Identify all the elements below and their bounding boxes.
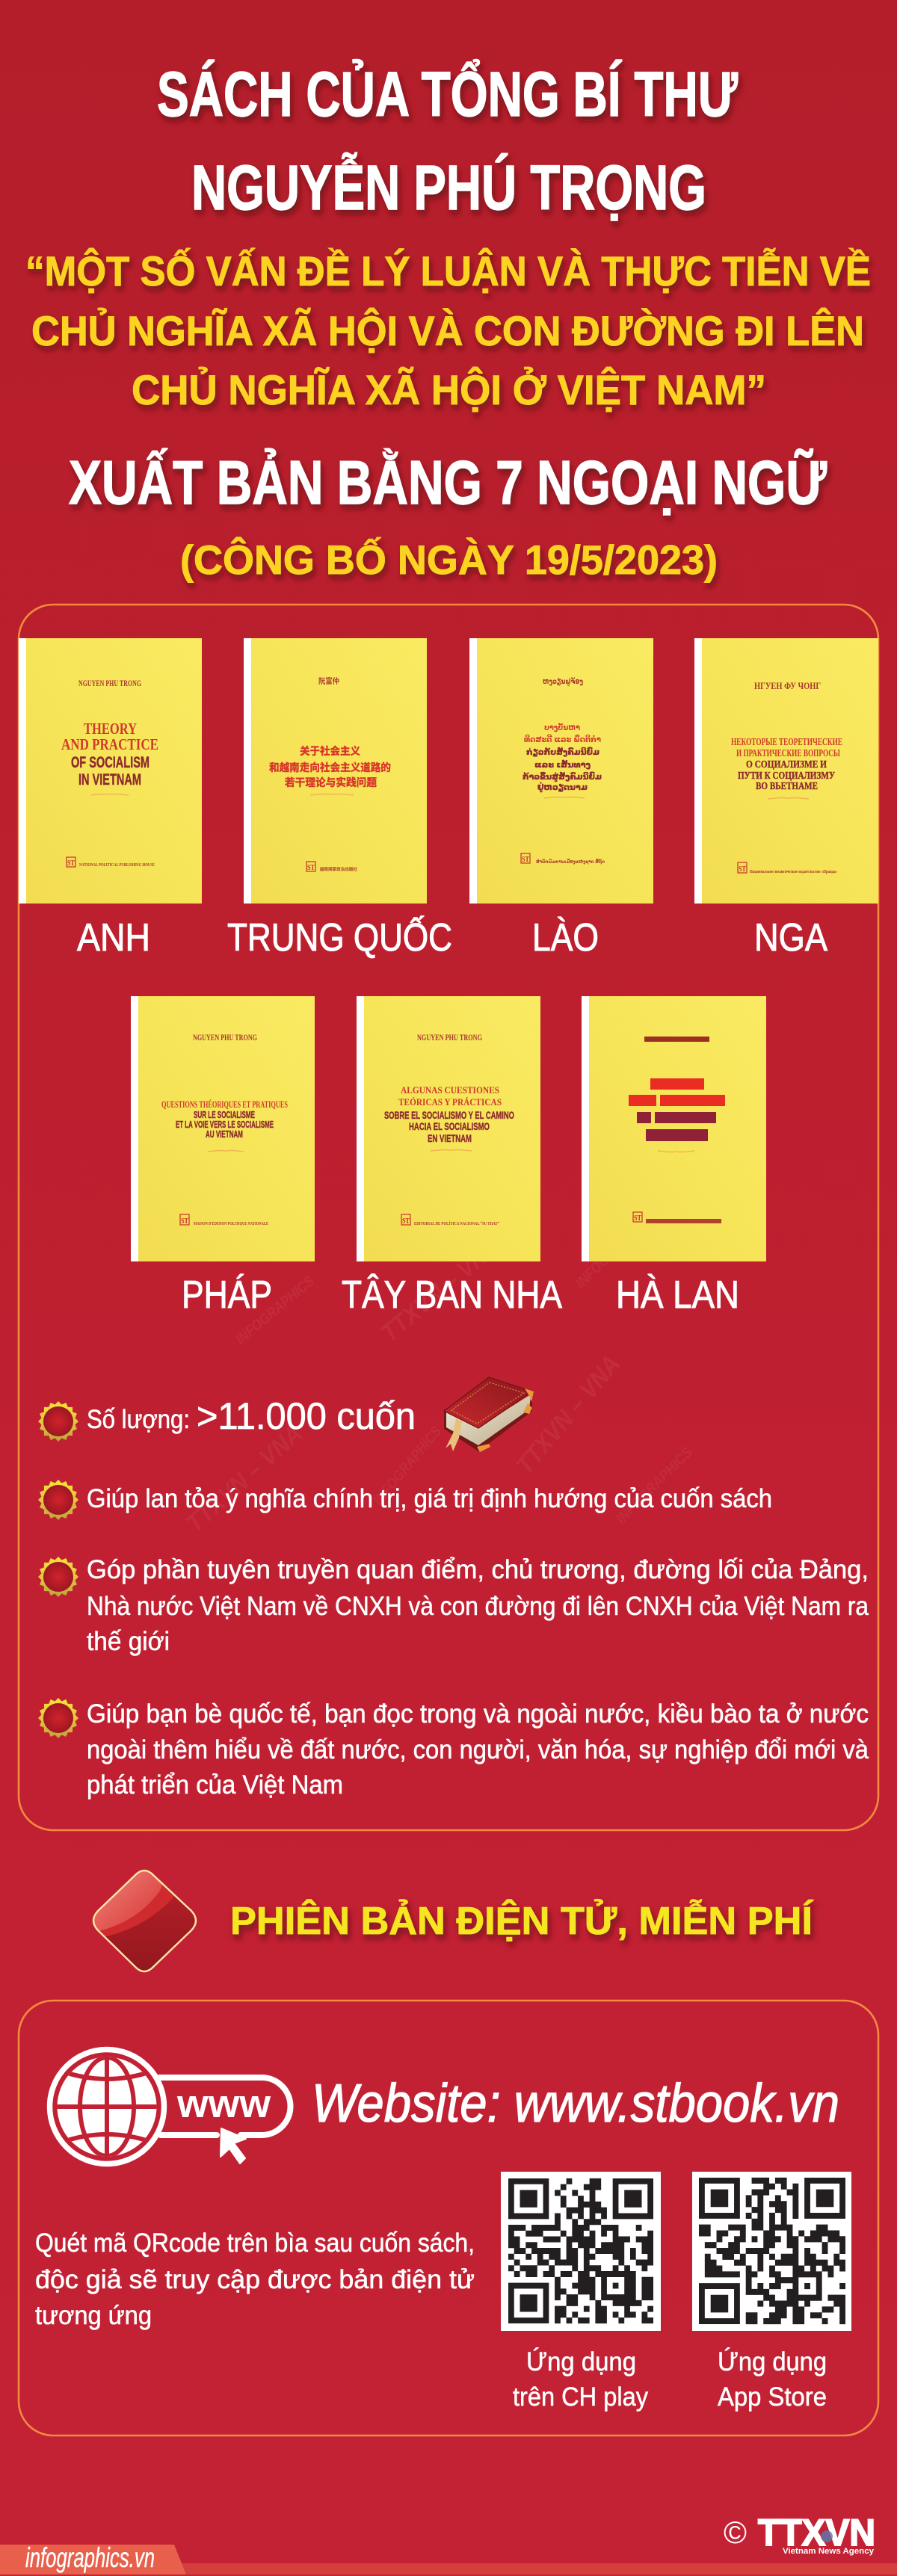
caption: App Store: Ứng dụng: [718, 2347, 827, 2376]
book: Lao: ບາງບັນຫາ: [544, 723, 580, 732]
quantity text: [87, 1395, 416, 1437]
book: English: THEORY: [84, 720, 137, 738]
bullet: propaganda: [37, 1555, 869, 1656]
text: Góp phần tuyên truyền quan điểm, chủ trương, đường lối của Đảng,: [87, 1555, 869, 1584]
panel border: [19, 2001, 878, 2436]
book: English: NGUYEN PHU TRONG: [78, 678, 141, 688]
text: Giúp bạn bè quốc tế, bạn đọc trong và ngoài nước, kiều bào ta ở nước: [87, 1699, 869, 1729]
QR code: App Store: [692, 2172, 851, 2331]
book: French: [131, 996, 315, 1261]
caption: CH play: Ứng dụng: [526, 2347, 636, 2376]
logo: TTXVN: ©: [724, 2515, 747, 2550]
website address: Website: www.stbook.vn: [312, 2074, 839, 2134]
logo: TTXVN: Vietnam News Agency: [783, 2547, 875, 2556]
text: Giúp lan tỏa ý nghĩa chính trị, giá trị định hướng của cuốn sách: [87, 1484, 772, 1513]
watermarks: INFOGRAPHICS: [370, 1423, 446, 1508]
watermarks: TTXVN – VNA: [511, 1350, 626, 1480]
heading: electronic edition: PHIÊN BẢN ĐIỆN TỬ, MIỄN PHÍ: [230, 1899, 814, 1943]
book: Chinese: ST: [307, 863, 315, 872]
icon: seal bullet: [37, 1697, 79, 1739]
book: Spanish: NGUYEN PHU TRONG: [417, 1032, 482, 1043]
watermarks: TTXVN – VNA: [181, 1419, 308, 1538]
panel: website and QR codes: [19, 2001, 878, 2436]
watermarks: TTXVN – VNA: [376, 1232, 506, 1347]
book: Spanish: SOBRE EL SOCIALISMO Y EL CAMINO: [384, 1109, 514, 1121]
bullet: quantity: [37, 1377, 534, 1452]
icon: www globe: [49, 2049, 290, 2164]
book: Russian: О СОЦИАЛИЗМЕ И: [746, 759, 827, 770]
book: English: NATIONAL POLITICAL PUBLISHING HOUSE: [79, 862, 155, 868]
watermarks: INFOGRAPHICS: [613, 1444, 696, 1528]
book: Spanish: ST: [402, 1217, 410, 1226]
book title in yellow: CHỦ NGHĨA XÃ HỘI VÀ CON ĐƯỜNG ĐI LÊN: [31, 307, 864, 354]
quantity text: Số lượng:: [87, 1405, 190, 1434]
book: Russian: НГУЕН ФУ ЧОНГ: [754, 680, 821, 691]
book: Lao: ສຳນັກພິມການເມືອງແຫ່ງຊາດ ສື່ຖັດ: [536, 858, 605, 865]
watermarks: [181, 1211, 696, 1538]
book: Russian: ВО ВЬЕТНАМЕ: [756, 781, 818, 792]
row 1 language labels: LÀO: [532, 916, 599, 960]
title: [25, 59, 871, 583]
row 1 language labels: TRUNG QUỐC: [227, 915, 452, 960]
watermarks: INFOGRAPHICS: [573, 1211, 653, 1292]
book: Russian: И ПРАКТИЧЕСКИЕ ВОПРОСЫ: [736, 748, 840, 759]
book: Russian: ST: [739, 865, 746, 874]
book: Lao: [469, 638, 653, 904]
row 2 language labels: HÀ LAN: [616, 1273, 739, 1317]
book: English: OF SOCIALISM: [71, 754, 150, 771]
QR code: CH play: [501, 2172, 661, 2331]
book: Dutch: ST: [634, 1214, 641, 1223]
title line 1: SÁCH CỦA TỔNG BÍ THƯ: [157, 59, 738, 129]
book: English: ST: [67, 859, 75, 868]
footer band: [0, 2542, 897, 2575]
book: English: AND PRACTICE: [61, 735, 158, 753]
book: Spanish: EN VIETNAM: [428, 1132, 472, 1144]
instructions: Quét mã QRcode trên bìa sau cuốn sách,: [35, 2228, 475, 2258]
text: thế giới: [87, 1627, 170, 1656]
title line 2: NGUYỄN PHÚ TRỌNG: [191, 152, 706, 223]
book: French: ST: [181, 1217, 188, 1226]
watermarks: INFOGRAPHICS: [232, 1273, 318, 1348]
book: Chinese: 阮富仲: [318, 676, 339, 686]
book: French: NGUYEN PHU TRONG: [193, 1032, 257, 1043]
book: Spanish: [357, 996, 540, 1261]
book: Chinese: 越南国家政治出版社: [320, 866, 357, 872]
book: Spanish: HACIA EL SOCIALISMO: [409, 1120, 490, 1132]
book: French: QUESTIONS THÉORIQUES ET PRATIQUES: [161, 1099, 288, 1110]
book: Lao: ແລະ ເສັ້ນທາງ: [534, 760, 591, 770]
instructions: [35, 2228, 475, 2330]
text: phát triển của Việt Nam: [87, 1770, 343, 1800]
book: Lao: ST: [522, 855, 529, 864]
bullet: international understanding: [37, 1697, 869, 1800]
book: Spanish: EDITORIAL DE POLÍTICA NACIONAL “SU THAT”: [414, 1220, 499, 1226]
book title in yellow: [25, 247, 871, 413]
row 2 language labels: TÂY BAN NHA: [342, 1273, 562, 1317]
book: Lao: ຢູ່ຫວຽດນາມ: [537, 782, 588, 793]
book: Lao: ຫງວຽນຝູຈ້ອງ: [543, 676, 583, 687]
book: Lao: ທິດສະດີ ແລະ ພຶດຕິກຳ: [524, 734, 601, 744]
book: French: AU VIETNAM: [206, 1128, 243, 1140]
book: Dutch: [582, 996, 766, 1261]
caption: App Store: App Store: [718, 2382, 827, 2412]
text: [87, 1555, 869, 1656]
row 2 language labels: [182, 1273, 739, 1317]
icon: glossy diamond: [93, 1870, 197, 1973]
caption: CH play: [513, 2347, 648, 2412]
icon: seal bullet: [37, 1400, 79, 1442]
book: Chinese: [244, 638, 427, 904]
book: Spanish: TEÓRICAS Y PRÁCTICAS: [398, 1096, 502, 1108]
book: French: SUR LE SOCIALISME: [194, 1109, 255, 1120]
text: [87, 1699, 869, 1800]
caption: App Store: [718, 2347, 827, 2412]
book: Spanish: ALGUNAS CUESTIONES: [401, 1084, 499, 1096]
bullet: spreading meaning: [37, 1479, 772, 1521]
row 2 language labels: PHÁP: [182, 1273, 272, 1317]
book title in yellow: CHỦ NGHĨA XÃ HỘI Ở VIỆT NAM”: [132, 366, 766, 413]
row 1 language labels: [77, 915, 827, 960]
book: Russian: Национальное политическое издательство «Правда»: [750, 870, 837, 874]
caption: CH play: trên CH play: [513, 2382, 648, 2412]
book: Chinese: 和越南走向社会主义道路的: [269, 762, 391, 773]
instructions: độc giả sẽ truy cập được bản điện tử: [35, 2265, 475, 2294]
panel border: [19, 605, 878, 1830]
quantity text: >11.000 cuốn: [197, 1395, 416, 1437]
icon: www globe: www: [176, 2082, 271, 2126]
row 1 language labels: NGA: [754, 916, 827, 960]
instructions: tương ứng: [35, 2301, 152, 2330]
row 1 language labels: ANH: [77, 916, 150, 960]
book: Lao: ກ່ຽວກັບສັງຄົມນິຍົມ: [526, 747, 599, 757]
book: French: ET LA VOIE VERS LE SOCIALISME: [176, 1119, 274, 1130]
logo: TTXVN: TTXVN: [758, 2512, 875, 2554]
icon: seal bullet: [37, 1556, 79, 1598]
book: Russian: НЕКОТОРЫЕ ТЕОРЕТИЧЕСКИЕ: [731, 737, 842, 748]
icon: red book: [444, 1377, 534, 1452]
panel: books and purpose: [19, 605, 878, 1830]
icon: seal bullet: [37, 1479, 79, 1521]
book: French: MAISON D'EDITION POLITIQUE NATIONALE: [194, 1222, 268, 1226]
book: Chinese: 若干理论与实践问题: [285, 776, 377, 788]
book: Lao: ກ້າວຂຶ້ນສູ່ສັງຄົມນິຍົມ: [523, 771, 602, 782]
book: Russian: ПУТИ К СОЦИАЛИЗМУ: [738, 770, 835, 782]
publication date: (CÔNG BỐ NGÀY 19/5/2023): [180, 537, 718, 583]
book: Russian: [694, 638, 878, 904]
book: English: [19, 638, 202, 904]
book: English: IN VIETNAM: [78, 771, 141, 788]
book: Chinese: 关于社会主义: [300, 745, 360, 757]
footer site name: infographics.vn: [25, 2542, 155, 2573]
